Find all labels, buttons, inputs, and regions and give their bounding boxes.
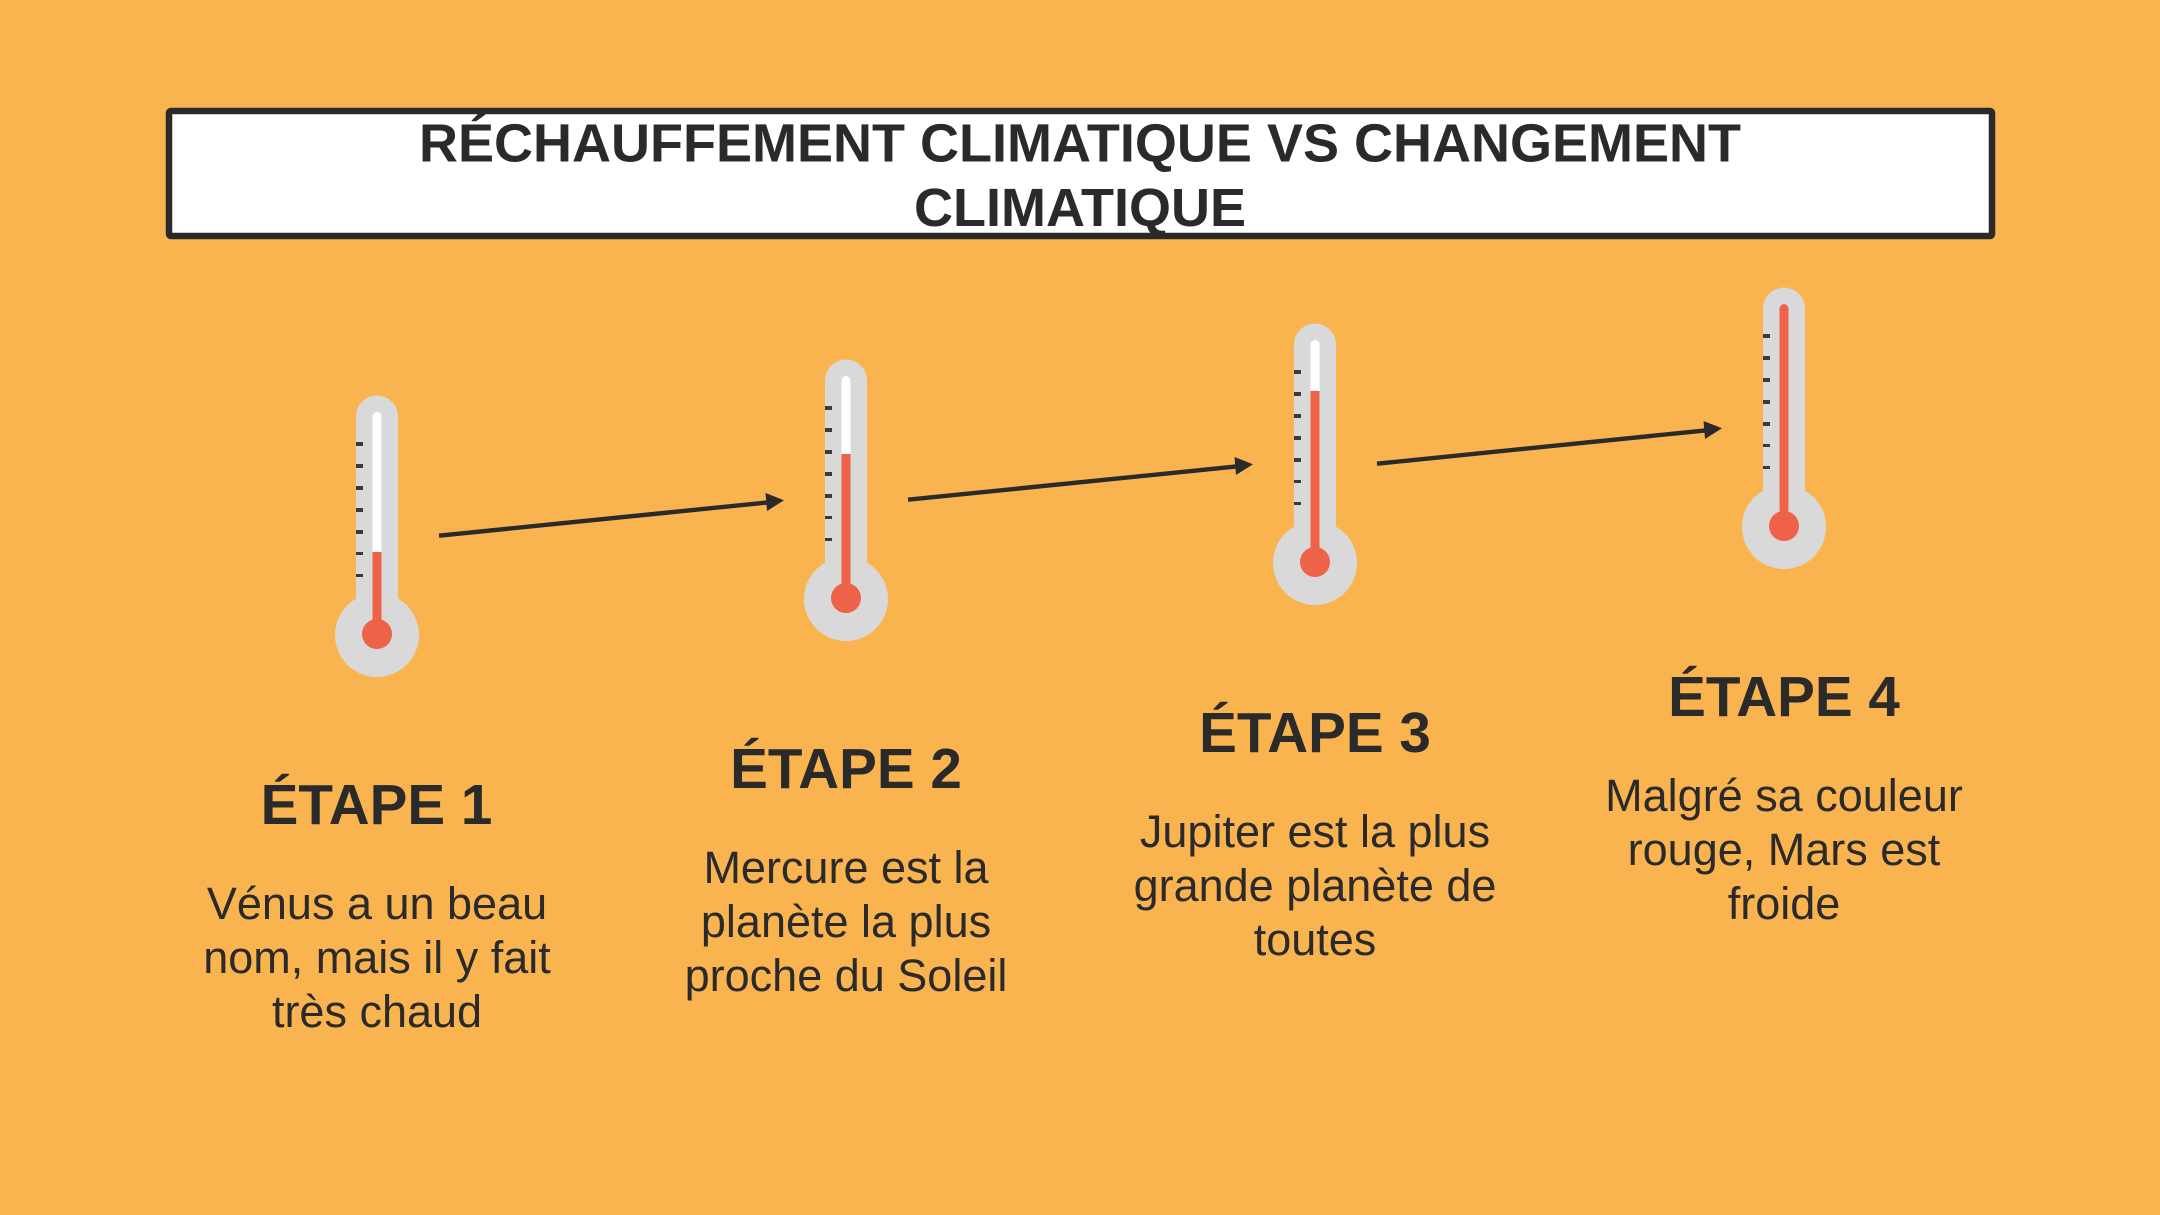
step 2 thermometer: [804, 360, 888, 641]
step 3 thermometer: [1273, 324, 1357, 605]
step 1 description: [203, 878, 551, 1037]
step 2 description: [685, 842, 1007, 1001]
step 4 description: rouge, Mars est: [1628, 824, 1941, 875]
step 2 description: proche du Soleil: [685, 950, 1007, 1001]
step 4 description: [1605, 770, 1963, 929]
step 3 heading: ÉTAPE 3: [1199, 701, 1431, 764]
step 3 description: toutes: [1254, 914, 1376, 965]
step 1 thermometer: [335, 396, 419, 677]
step 2 heading: ÉTAPE 2: [730, 737, 962, 800]
title banner: RÉCHAUFFEMENT CLIMATIQUE VS CHANGEMENT: [419, 114, 1741, 174]
arrow 2 to 3: [908, 457, 1253, 500]
step 4 thermometer: [1742, 288, 1826, 569]
title banner: CLIMATIQUE: [914, 178, 1246, 238]
step 3 description: [1134, 806, 1496, 965]
step 1 description: Vénus a un beau: [207, 878, 547, 929]
step 1 description: très chaud: [272, 986, 482, 1037]
step 1 heading: ÉTAPE 1: [261, 773, 492, 836]
arrow 3 to 4: [1377, 421, 1722, 464]
step 4 description: froide: [1728, 878, 1840, 929]
step 4 heading: ÉTAPE 4: [1668, 665, 1900, 728]
arrow 1 to 2: [439, 493, 784, 536]
step 4 description: Malgré sa couleur: [1605, 770, 1963, 821]
step 1 description: nom, mais il y fait: [203, 932, 551, 983]
title banner: [169, 111, 1992, 238]
step 2 description: Mercure est la: [703, 842, 990, 893]
step 2 description: planète la plus: [701, 896, 991, 947]
step 3 description: grande planète de: [1134, 860, 1496, 911]
step 3 description: Jupiter est la plus: [1140, 806, 1490, 857]
